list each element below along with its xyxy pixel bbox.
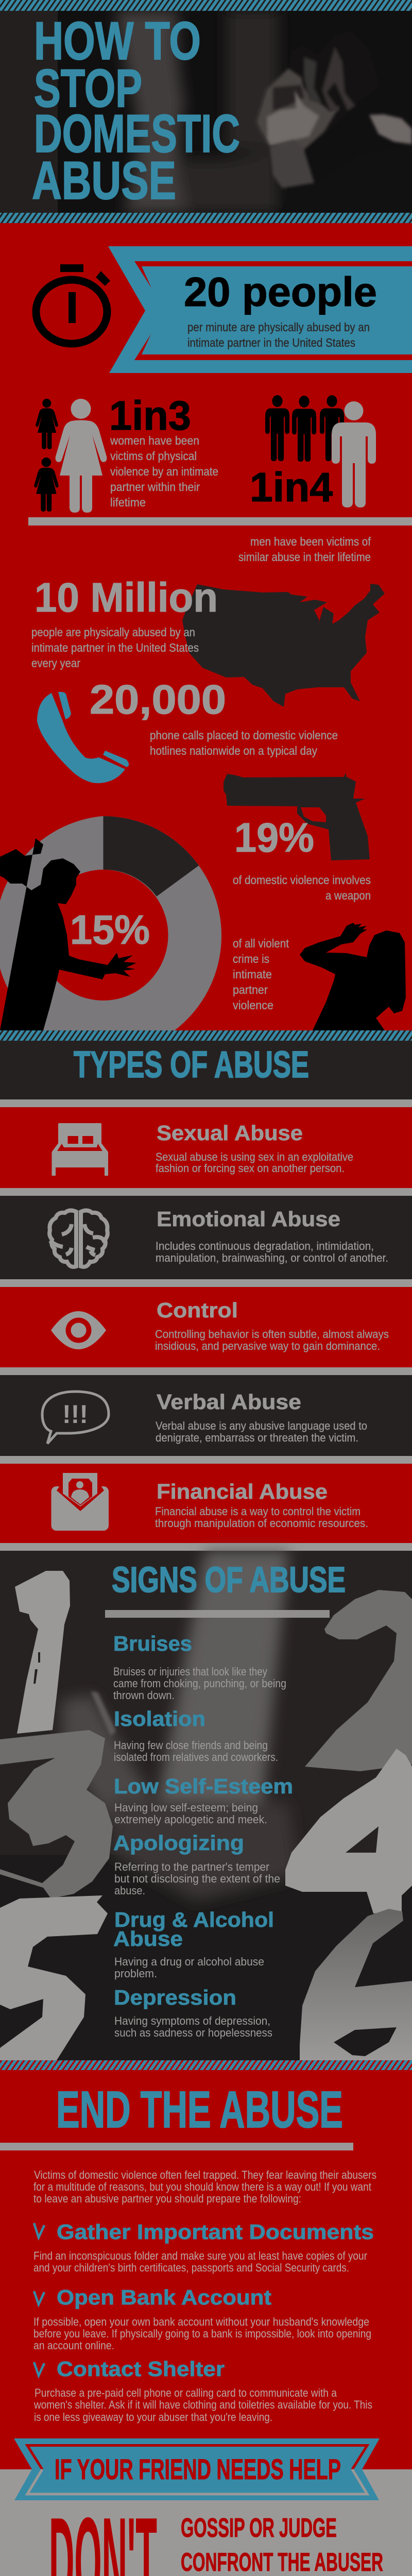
- icon: speech bubble: !!!: [62, 1400, 88, 1429]
- text: women victims: partner within their: [110, 480, 200, 494]
- top stripe band: [0, 0, 412, 11]
- ribbon: if your friend needs help: [14, 2438, 380, 2500]
- sign: isolation: isolated from relatives and coworkers.: [114, 1751, 278, 1764]
- step: open bank account: an account online.: [33, 2339, 114, 2352]
- financial abuse row: [52, 1473, 368, 1531]
- step: gather documents: and your children's birth certificates, passports and Social Security cards.: [33, 2261, 349, 2274]
- text: people abused: intimate partner in the United States: [31, 641, 199, 654]
- title: STOP: [34, 59, 142, 118]
- emotional abuse row: Includes continuous degradation, intimidation,: [156, 1240, 374, 1252]
- sign: drug and alcohol abuse: Having a drug or alcohol abuse: [114, 1955, 264, 1968]
- intro text: to leave an abusive partner you should prepare the following:: [33, 2192, 301, 2205]
- ribbon: 20 people: [108, 246, 412, 373]
- title: ABUSE: [32, 151, 176, 211]
- intro text: [33, 2168, 376, 2205]
- step: open bank account: Open Bank Account: [57, 2285, 271, 2309]
- numeral 5: [0, 1895, 108, 2060]
- sign: low self-esteem: Having low self-esteem; being: [114, 1801, 258, 1814]
- text: weapon: [233, 873, 371, 902]
- icon: eye: [51, 1311, 106, 1349]
- text: women victims: women have been: [110, 434, 199, 447]
- icon: handgun: [224, 773, 370, 860]
- financial abuse row: Financial Abuse: [157, 1480, 328, 1503]
- stat: 1 in 4: 1in4: [250, 464, 333, 510]
- icon: telephone: [37, 692, 129, 783]
- sign: bruises: thrown down.: [113, 1689, 175, 1702]
- text: people abused: [31, 625, 199, 670]
- text: weapon: a weapon: [325, 889, 371, 902]
- financial abuse row: through manipulation of economic resources.: [155, 1517, 368, 1530]
- donut chart: 15 percent: [0, 816, 221, 1030]
- title: [32, 11, 240, 211]
- numeral 1: [15, 1571, 70, 1734]
- text: violent crime: partner: [233, 983, 268, 996]
- sign: bruises: [113, 1632, 286, 1702]
- divider bar: [105, 1610, 330, 1618]
- emotional abuse row: manipulation, brainwashing, or control of another.: [156, 1251, 388, 1264]
- step: gather documents: Find an inconspicuous folder and make sure you at least have copies of your: [33, 2249, 367, 2262]
- panel: signs of abuse: [0, 1551, 412, 2060]
- stat: 15%: 15%: [70, 907, 150, 953]
- list of don'ts: [181, 2513, 383, 2576]
- sign: apologizing: but not disclosing the extent of the: [114, 1872, 280, 1885]
- sign: depression: Having symptoms of depression,: [114, 2014, 270, 2027]
- sign: drug and alcohol abuse: Drug & Alcohol: [114, 1908, 274, 1931]
- control row: insidious, and pervasive way to gain dominance.: [155, 1340, 380, 1352]
- stat: 20,000: 20,000: [90, 676, 226, 722]
- step: open bank account: If possible, open your own bank account without your husband's knowledge: [33, 2315, 369, 2328]
- text: phone calls: phone calls placed to domestic violence: [150, 728, 338, 742]
- stat description: per minute are physically abused by an: [187, 320, 370, 334]
- stat: 20 people: 20 people: [184, 269, 377, 315]
- stat: 1 in 3: 1in3: [109, 393, 191, 438]
- stat description: [187, 320, 370, 349]
- financial abuse row: Financial abuse is a way to control the victim: [155, 1505, 360, 1518]
- icon: men pictogram: [265, 395, 376, 507]
- text: violent crime: of all violent: [233, 937, 289, 950]
- emotional abuse row: [49, 1207, 388, 1267]
- text: violent crime: violence: [233, 998, 273, 1012]
- text: women victims: lifetime: [110, 496, 146, 509]
- stripe band: end the abuse: [0, 2060, 412, 2070]
- control row: Control: [157, 1298, 238, 1322]
- divider bar: [0, 2143, 353, 2150]
- step: open bank account: before you leave. If physically going to a bank is impossible, look into opening: [33, 2327, 371, 2340]
- step: contact shelter: [33, 2357, 372, 2424]
- stat description: intimate partner in the United States: [187, 336, 355, 349]
- verbal abuse row: denigrate, embarrass or threaten the victim.: [156, 1431, 358, 1444]
- text: women victims: violence by an intimate: [110, 465, 218, 478]
- sign: depression: such as sadness or hopelessness: [114, 2026, 272, 2039]
- step: gather documents: [33, 2220, 374, 2274]
- title: DOMESTIC: [34, 104, 240, 164]
- map: United States silhouette: [182, 584, 385, 707]
- step: open bank account: [33, 2285, 371, 2352]
- step: gather documents: Gather Important Documents: [57, 2220, 374, 2244]
- sign: drug and alcohol abuse: Abuse: [113, 1927, 183, 1951]
- icon: money envelope: [52, 1473, 109, 1531]
- numeral 4: [285, 1749, 412, 1913]
- icon: women pictogram: [34, 399, 107, 513]
- heading: signs of abuse: SIGNS OF ABUSE: [112, 1560, 346, 1600]
- silhouette: attacking man: [0, 838, 136, 1030]
- text: women victims: victims of physical: [110, 449, 197, 463]
- sign: isolation: [114, 1707, 278, 1764]
- numeral 2 right: [305, 1590, 412, 1771]
- header panel: [0, 10, 412, 213]
- icon: stopwatch: [36, 264, 110, 344]
- sexual abuse row: Sexual Abuse: [157, 1121, 303, 1145]
- silhouette: cowering woman: [300, 923, 406, 1030]
- photo: woman covering her head: [256, 31, 412, 213]
- sign: low self-esteem: extremely apologetic and meek.: [114, 1813, 267, 1826]
- panel: types of abuse: [0, 1030, 412, 1551]
- step: contact shelter: Purchase a pre-paid cell phone or calling card to communicate with a: [35, 2386, 337, 2399]
- text: people abused: people are physically abused by an: [31, 625, 195, 639]
- sexual abuse row: [52, 1121, 353, 1176]
- title: HOW TO: [34, 11, 201, 71]
- sign: isolation: Having few close friends and being: [114, 1739, 268, 1752]
- sign: isolation: Isolation: [114, 1707, 205, 1731]
- photo: arm and hand background: [62, 1551, 299, 1901]
- sign: drug and alcohol abuse: problem.: [114, 1967, 157, 1980]
- step: contact shelter: Contact Shelter: [57, 2357, 225, 2381]
- stat: 10 million: 10 Million: [35, 574, 218, 620]
- text: men victims: [238, 535, 371, 564]
- panel: don't list: [0, 2438, 412, 2576]
- control row: Controlling behavior is often subtle, almost always: [155, 1328, 389, 1341]
- heading: types of abuse: TYPES OF ABUSE: [74, 1044, 309, 1086]
- text: violent crime: [233, 937, 289, 1012]
- text: phone calls: hotlines nationwide on a typical day: [150, 744, 317, 757]
- sign: bruises: Bruises or injuries that look like they: [113, 1665, 267, 1678]
- sign: low self-esteem: Low Self-Esteem: [114, 1774, 293, 1798]
- icon: bed: [52, 1123, 108, 1176]
- control row: [51, 1298, 389, 1352]
- text: women victims: [110, 434, 218, 509]
- sign: bruises: Bruises: [113, 1632, 192, 1655]
- text: weapon: of domestic violence involves: [233, 873, 371, 887]
- verbal abuse row: Verbal abuse is any abusive language used to: [156, 1419, 367, 1432]
- sign: apologizing: Referring to the partner's temper: [114, 1860, 269, 1873]
- stat: 19%: 19%: [234, 815, 314, 860]
- sexual abuse row: Sexual abuse is using sex in an exploitative: [156, 1150, 353, 1163]
- sign: drug and alcohol abuse: [113, 1908, 274, 1980]
- sign: depression: Depression: [114, 1986, 236, 2009]
- bottom header stripe band: [0, 213, 412, 223]
- text: violent crime: crime is: [233, 952, 269, 965]
- icon: speech bubble: [42, 1392, 109, 1444]
- text: phone calls: [150, 728, 338, 757]
- verbal abuse row: [42, 1390, 367, 1444]
- emotional abuse row: Emotional Abuse: [157, 1207, 340, 1231]
- sign: apologizing: abuse.: [114, 1884, 145, 1897]
- sexual abuse row: fashion or forcing sex on another person.: [156, 1162, 345, 1175]
- text: men victims: men have been victims of: [250, 535, 371, 548]
- sign: apologizing: [113, 1831, 280, 1897]
- sign: depression: [114, 1986, 272, 2039]
- step: contact shelter: is one less giveaway to your abuser that you're leaving.: [34, 2411, 272, 2424]
- sign: apologizing: Apologizing: [113, 1831, 244, 1855]
- verbal abuse row: Verbal Abuse: [157, 1390, 301, 1414]
- sign: low self-esteem: [114, 1774, 293, 1826]
- text: people abused: every year: [31, 656, 80, 670]
- divider bar: [28, 517, 412, 526]
- text: men victims: similar abuse in their lifetime: [238, 550, 371, 564]
- numeral 6: [300, 1909, 412, 2060]
- icon: brain: [49, 1210, 108, 1267]
- text: violent crime: intimate: [233, 968, 272, 981]
- numeral 3 left: [0, 1730, 113, 1899]
- sign: bruises: came from choking, punching, or being: [113, 1677, 286, 1690]
